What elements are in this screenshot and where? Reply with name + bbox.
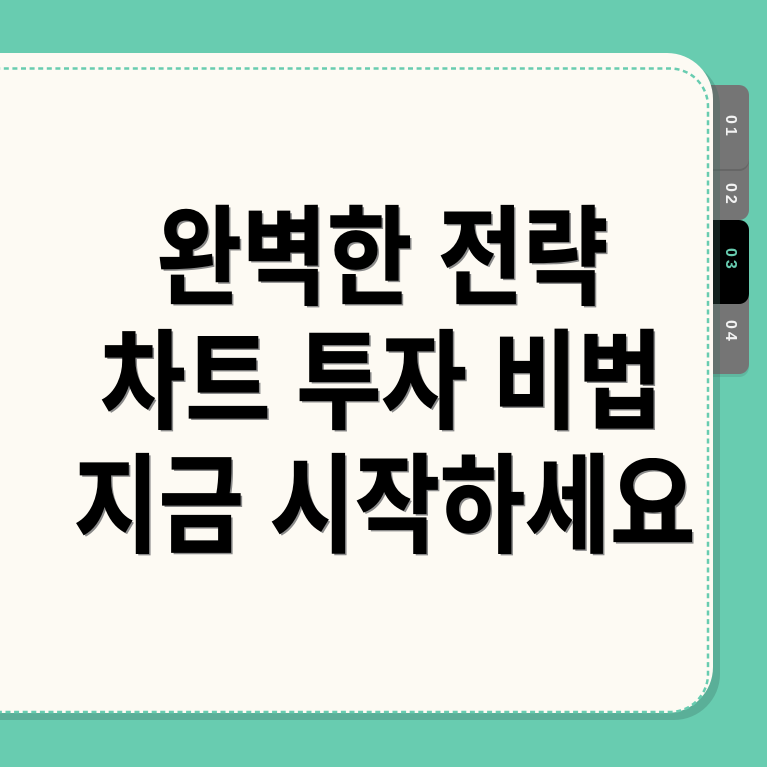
tab number 02: 02 xyxy=(722,183,739,207)
title line 1: 완벽한 전략 xyxy=(157,171,608,327)
title line 2: 차트 투자 비법 xyxy=(100,295,663,451)
tab 01 xyxy=(700,85,749,169)
tab number 01: 01 xyxy=(722,115,739,139)
card xyxy=(0,53,713,713)
tabs xyxy=(710,85,749,377)
tab number 04: 04 xyxy=(722,320,739,344)
tab 04 xyxy=(700,289,749,374)
tab number 03: 03 xyxy=(722,248,739,272)
title line 3: 지금 시작하세요 xyxy=(74,419,695,575)
tab 02 xyxy=(700,135,749,220)
tab 03 (active) xyxy=(700,220,749,304)
